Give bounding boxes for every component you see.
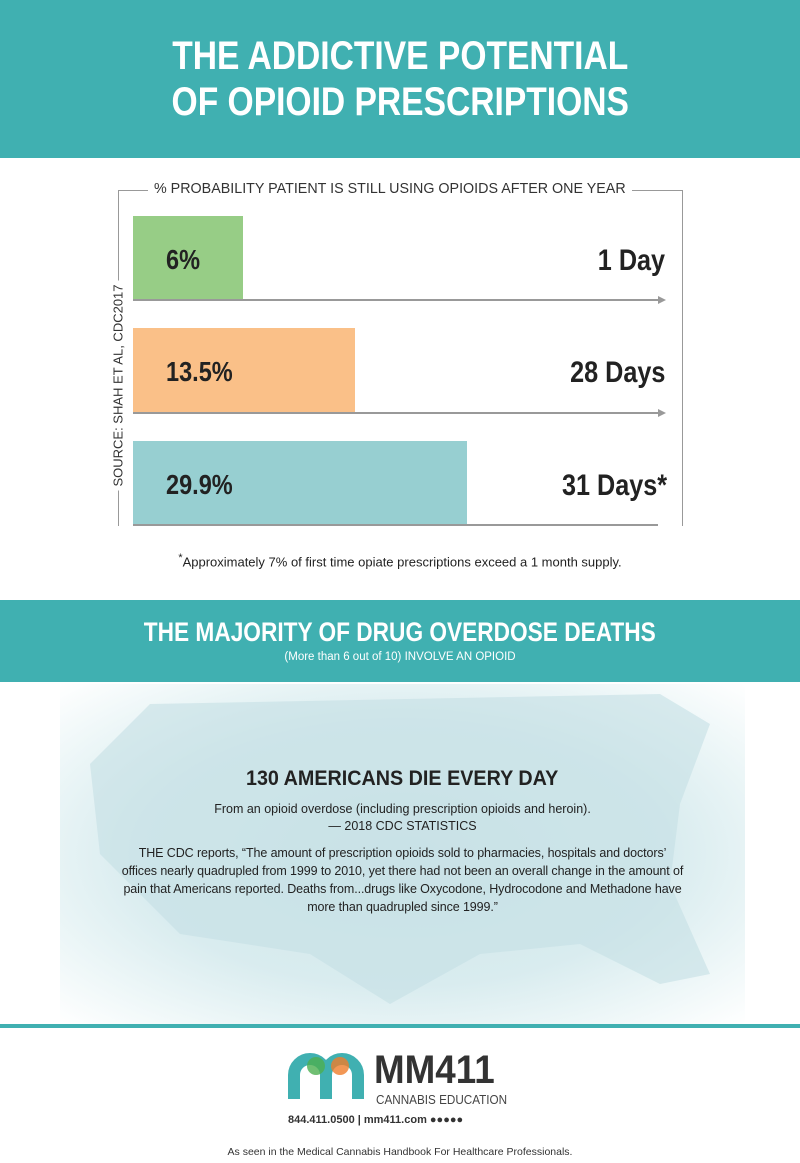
title (171, 34, 629, 124)
logo icon (288, 1053, 364, 1099)
arrow 1 (133, 296, 666, 304)
section heading: THE MAJORITY OF DRUG OVERDOSE DEATHS (144, 617, 656, 647)
contact: 844.411.0500 | mm411.com ●●●●● (288, 1114, 463, 1126)
stat heading: 130 AMERICANS DIE EVERY DAY (246, 767, 559, 790)
footnote: *Approximately 7% of first time opiate prescriptions exceed a 1 month supply. (178, 552, 622, 569)
chart heading: % PROBABILITY PATIENT IS STILL USING OPIOIDS AFTER ONE YEAR (154, 181, 626, 197)
chart frame (118, 190, 683, 526)
header banner (0, 0, 800, 158)
map outline (90, 694, 710, 1004)
divider teal (0, 1024, 800, 1028)
title: OF OPIOID PRESCRIPTIONS (171, 80, 629, 124)
stat text: From an opioid overdose (including prescription opioids and heroin). (214, 802, 591, 816)
label 31 days: 31 Days* (562, 469, 667, 502)
label 28 days: 28 Days (570, 356, 665, 389)
logo (288, 1048, 507, 1126)
label 1 day: 1 Day (598, 244, 665, 277)
bar 31 days: 29.9% (166, 469, 233, 500)
section subheading: (More than 6 out of 10) INVOLVE AN OPIOID (284, 651, 516, 663)
bar 31 days (133, 441, 467, 525)
bar 1 day: 6% (166, 244, 200, 275)
map panel (60, 684, 745, 1024)
bar 1 day (133, 216, 243, 300)
source label: SOURCE: SHAH ET AL, CDC2017 (110, 284, 126, 487)
stat text: — 2018 CDC STATISTICS (328, 819, 477, 833)
logo text: MM411 (374, 1048, 495, 1092)
bottom note: As seen in the Medical Cannabis Handbook For Healthcare Professionals. (228, 1146, 572, 1158)
stat text (214, 802, 591, 833)
section banner (0, 600, 800, 682)
chart panel (110, 181, 683, 526)
arrow 2 (133, 409, 666, 417)
bar 28 days (133, 328, 355, 413)
logo: CANNABIS EDUCATION (376, 1092, 507, 1107)
title: THE ADDICTIVE POTENTIAL (172, 34, 628, 78)
arrow 3 (133, 524, 658, 526)
quote text: THE CDC reports, “The amount of prescription opioids sold to pharmacies, hospitals and doctors’ offices nearly quadrupled from 1999 to 2010, yet there had not been an overall change in the amount of pain that Americans reported. Deaths from...drugs like Oxycodone, Hydrocodone and Methadone have more than quadrupled since 1999.” (122, 846, 683, 914)
bar 28 days: 13.5% (166, 356, 233, 387)
